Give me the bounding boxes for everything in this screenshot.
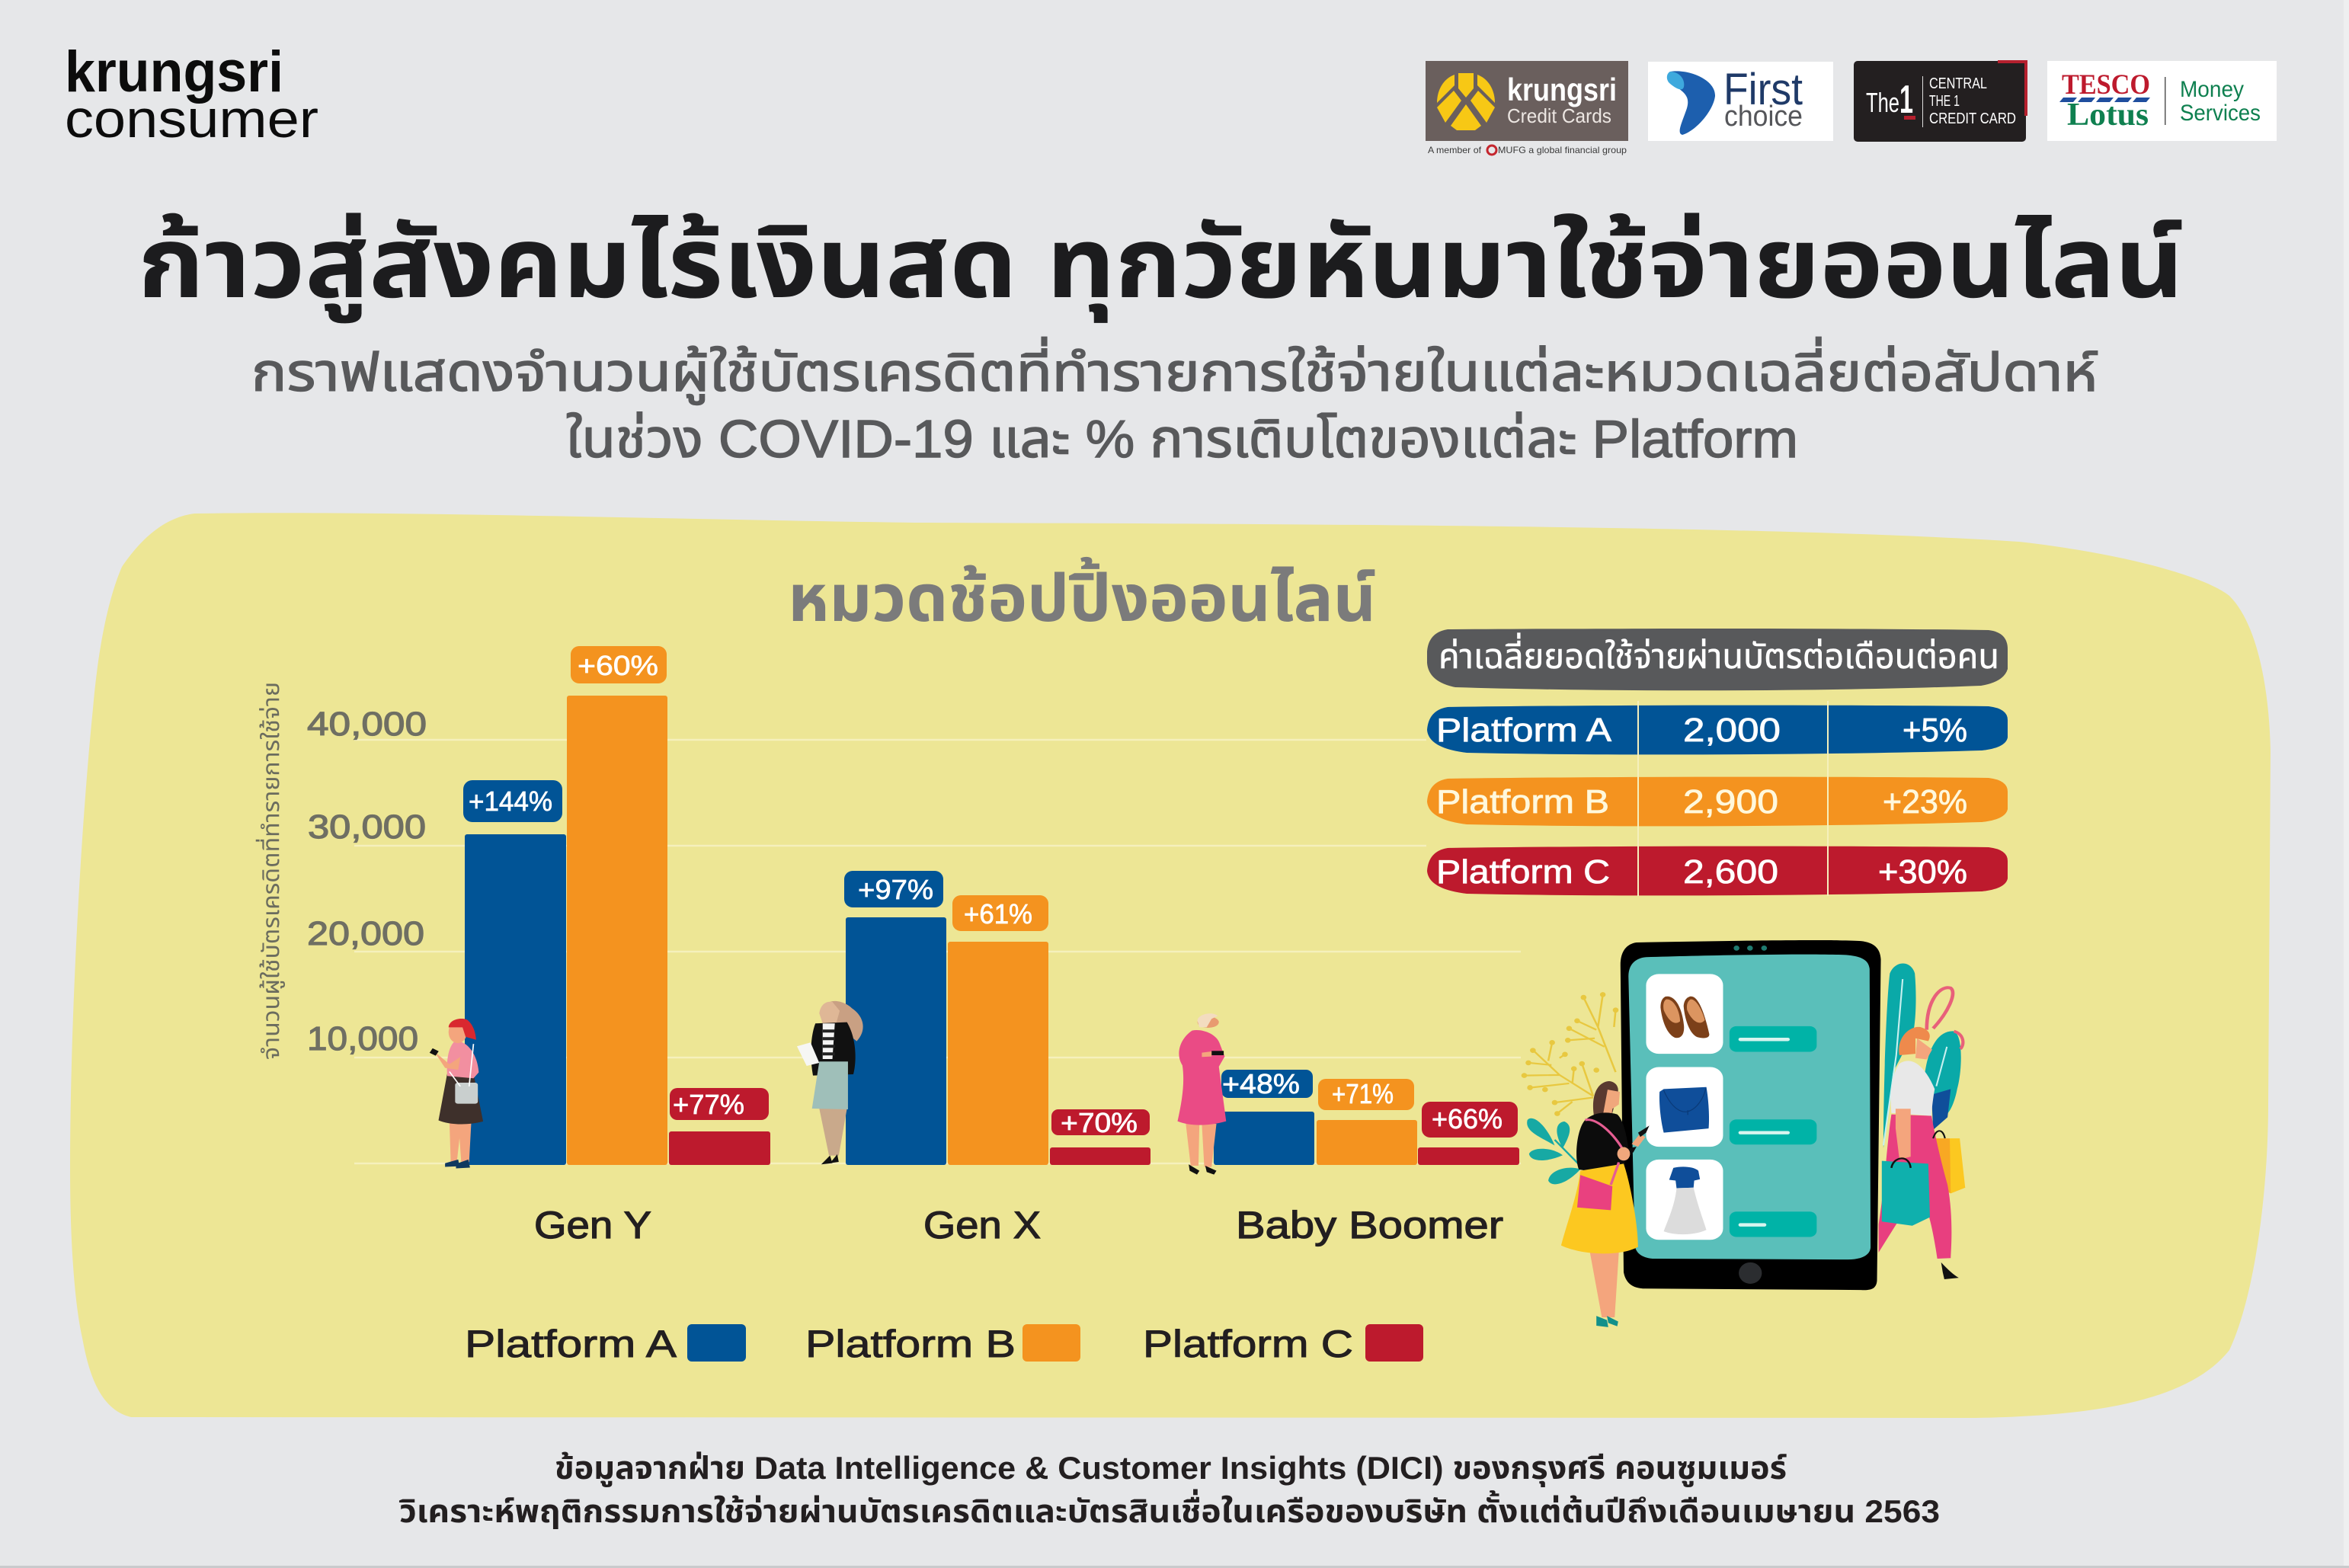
- logo: tesco lotus money services: [2047, 61, 2277, 141]
- y axis labels: 30,000: [308, 808, 426, 846]
- partner logos: [1426, 61, 2277, 155]
- illustration: tablet shopping with two women: [1522, 940, 1965, 1327]
- text: MUFG member line: [1428, 145, 1627, 155]
- icon: woman on right with shopping bags: [1879, 1027, 1965, 1279]
- table row: Platform B: Platform B: [1436, 783, 1609, 821]
- growth labels: Gen Y: +144%: [469, 786, 552, 817]
- logo: tesco lotus money services: Lotus: [2067, 98, 2149, 133]
- table header: [1427, 629, 2008, 690]
- logo: krungsri credit cards: Credit Cards: [1507, 104, 1611, 127]
- subtitle: กราฟแสดงจำนวนผู้ใช้บัตรเครดิตที่ทำรายการใช้จ่ายในแต่ละหมวดเฉลี่ยต่อสัปดาห์: [251, 337, 2098, 405]
- bars: Gen X: [846, 917, 1150, 1165]
- logo: first choice: choice: [1724, 101, 1803, 133]
- table row: Platform A: 2,000: [1683, 712, 1781, 749]
- growth labels: Gen X: +70%: [1061, 1107, 1138, 1138]
- product button 2: [1730, 1119, 1816, 1144]
- y axis labels: 20,000: [307, 915, 424, 952]
- bars: Gen Y: [465, 696, 770, 1165]
- logo: first choice: First: [1723, 65, 1803, 114]
- logo: krungsri consumer: consumer: [65, 89, 318, 149]
- table header: ค่าเฉลี่ยยอดใช้จ่ายผ่านบัตรต่อเดือนต่อคน: [1439, 632, 1999, 676]
- growth labels: Gen Y: +77%: [673, 1089, 744, 1120]
- logo: tesco lotus money services: Services: [2180, 101, 2261, 126]
- table row: Platform B: [1427, 777, 2008, 826]
- icon: yellow branches: [1522, 992, 1618, 1116]
- text: MUFG member line: A member of: [1428, 145, 1482, 155]
- growth labels: Gen X: +61%: [964, 898, 1032, 930]
- product card: dress: [1646, 1160, 1723, 1240]
- subtitle: ในช่วง COVID-19 และ % การเติบโตของแต่ละ Platform: [566, 409, 1798, 469]
- table row: Platform B: +23%: [1883, 783, 1967, 821]
- logo: the 1 credit card: CREDIT CARD: [1929, 110, 2016, 127]
- icon: woman with phone Gen Y: [430, 1019, 483, 1168]
- table: average spend per card: [1427, 629, 2008, 896]
- growth labels: Gen X: +97%: [858, 874, 933, 905]
- growth labels: Baby Boomer: +66%: [1432, 1103, 1503, 1134]
- logo: the 1 credit card: [1854, 61, 2026, 142]
- icon: teal leaves right: [1883, 963, 1963, 1148]
- title: ก้าวสู่สังคมไร้เงินสด ทุกวัยหันมาใช้จ่ายออนไลน์: [138, 207, 2184, 323]
- table row: Platform C: +30%: [1878, 853, 1967, 891]
- legend: Platform B: [805, 1323, 1080, 1365]
- category labels: [534, 1204, 1503, 1246]
- footer source note: วิเคราะห์พฤติกรรมการใช้จ่ายผ่านบัตรเครดิตและบัตรสินเชื่อในเครือของบริษัท ตั้งแต่ต้นปีถึงเดือนเมษายน 2563: [399, 1489, 1940, 1529]
- growth labels: Gen Y: [463, 646, 769, 1120]
- category labels: Baby Boomer: [1236, 1204, 1503, 1246]
- table row: Platform A: [1427, 706, 2008, 754]
- bar chart: [255, 646, 1521, 1246]
- logo: the 1 credit card: CENTRAL: [1929, 75, 1987, 92]
- y axis title: จำนวนผู้ใช้บัตรเครดิตที่ทำรายการใช้จ่าย: [255, 682, 285, 1060]
- logo: the 1 credit card: 1: [1899, 78, 1913, 122]
- logo: krungsri credit cards: krungsri: [1507, 72, 1617, 107]
- growth labels: Gen X: [844, 871, 1150, 1138]
- table row: Platform C: [1427, 846, 2008, 895]
- growth labels: Baby Boomer: +48%: [1222, 1068, 1300, 1099]
- legend: Platform B: Platform B: [805, 1323, 1016, 1365]
- table row: Platform A: Platform A: [1436, 712, 1612, 749]
- icon: older woman with phone Baby Boomer: [1177, 1013, 1226, 1175]
- product button 3: [1730, 1211, 1816, 1237]
- logo: first choice: [1648, 62, 1833, 141]
- icon: teal leaves left: [1527, 1118, 1585, 1184]
- growth labels: Gen Y: +60%: [578, 650, 658, 681]
- table row: Platform C: Platform C: [1436, 853, 1610, 891]
- product button 1: [1730, 1026, 1816, 1052]
- growth labels: Baby Boomer: +71%: [1332, 1078, 1394, 1109]
- category labels: Gen X: [923, 1204, 1041, 1246]
- legend: Platform A: Platform A: [465, 1323, 677, 1365]
- table row: Platform C: 2,600: [1683, 853, 1778, 891]
- legend: Platform C: [1143, 1323, 1423, 1365]
- logo: krungsri credit cards: [1426, 61, 1628, 141]
- product card: shoes: [1646, 974, 1723, 1054]
- logo: tesco lotus money services: Money: [2180, 77, 2244, 102]
- subtitle: [251, 337, 2098, 469]
- y axis labels: 10,000: [307, 1020, 418, 1058]
- table row: Platform A: +5%: [1903, 712, 1967, 749]
- legend: Platform C: Platform C: [1143, 1323, 1353, 1365]
- category labels: Gen Y: [534, 1204, 651, 1246]
- table row: Platform B: 2,900: [1683, 783, 1778, 821]
- footer source note: [399, 1450, 1940, 1529]
- logo: the 1 credit card: The: [1866, 87, 1899, 118]
- legend: [465, 1323, 1423, 1365]
- icon: woman on left with phone: [1561, 1081, 1650, 1327]
- y axis labels: [307, 706, 427, 1058]
- section heading: หมวดช้อปปิ้งออนไลน์: [788, 556, 1376, 635]
- product card: blue bag: [1646, 1067, 1723, 1147]
- icon: woman with document Gen X: [797, 1001, 863, 1164]
- footer source note: ข้อมูลจากฝ่าย Data Intelligence & Customer Insights (DICI) ของกรุงศรี คอนซูมเมอร์: [555, 1450, 1787, 1487]
- panel: yellow chart background: [70, 513, 2271, 1418]
- icon: tablet: [1621, 940, 1881, 1290]
- legend: Platform A: [465, 1323, 746, 1365]
- logo: tesco lotus money services: TESCO: [2062, 69, 2150, 101]
- bars: Baby Boomer: [1214, 1112, 1519, 1165]
- logo: the 1 credit card: THE 1: [1929, 93, 1960, 110]
- y axis labels: 40,000: [307, 706, 427, 743]
- text: MUFG member line: MUFG a global financial group: [1498, 145, 1627, 155]
- growth labels: Baby Boomer: [1221, 1068, 1518, 1138]
- logo: krungsri consumer: [65, 40, 318, 149]
- logo: krungsri consumer: krungsri: [65, 40, 283, 104]
